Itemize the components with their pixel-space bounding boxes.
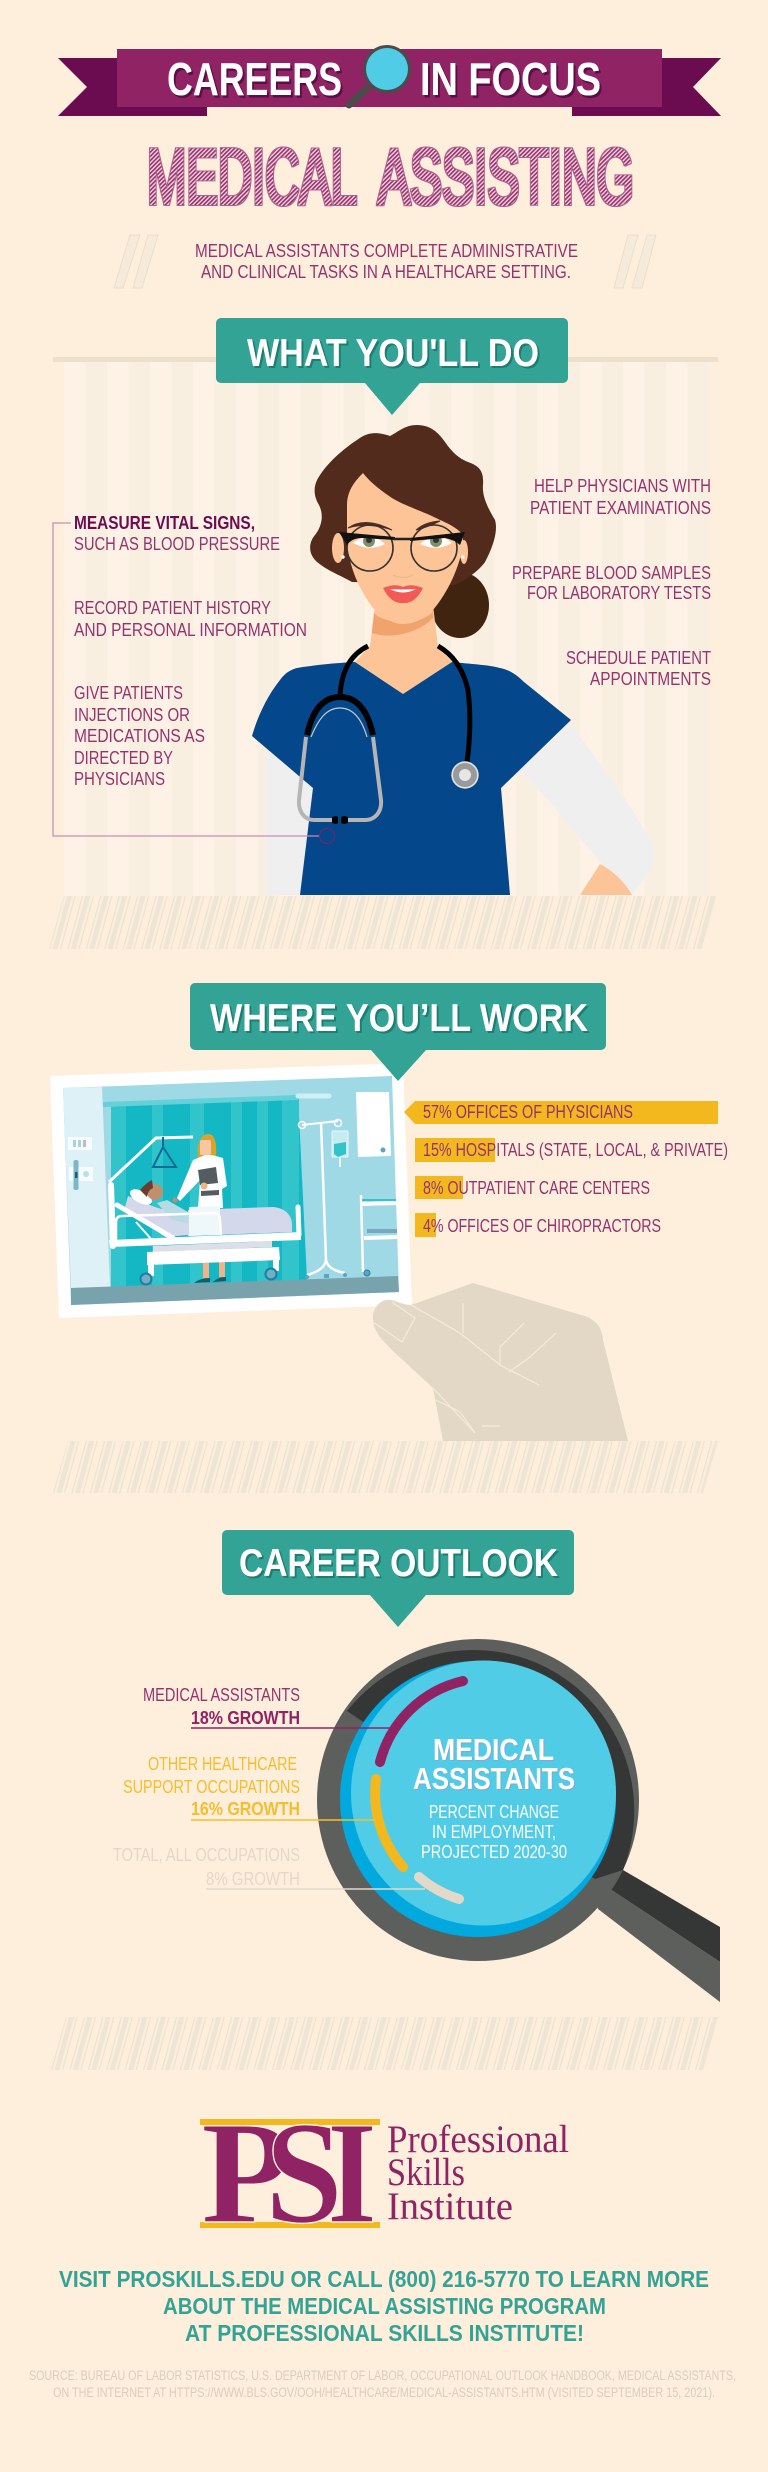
nurse glasses bbox=[339, 525, 465, 571]
bar: offices of physicians: 57% OFFICES OF PHYSICIANS bbox=[423, 1102, 633, 1122]
divider band 2 bbox=[53, 1441, 718, 1493]
duty: examinations: PATIENT EXAMINATIONS bbox=[530, 498, 711, 518]
cabinet bbox=[356, 1092, 391, 1157]
label: all occupations growth: 8% GROWTH bbox=[206, 1869, 300, 1889]
logo letters: P bbox=[201, 2091, 291, 2254]
ribbon title right: IN FOCUS bbox=[420, 53, 601, 105]
heading bubble: career outlook bbox=[222, 1530, 574, 1627]
duty: appointments: SCHEDULE PATIENT bbox=[566, 648, 711, 668]
header ribbon bbox=[58, 45, 721, 116]
stethoscope bbox=[299, 646, 479, 824]
text: right duties bbox=[512, 476, 711, 689]
nurse scrubs bbox=[252, 662, 571, 895]
duty: injections: DIRECTED BY bbox=[74, 748, 173, 768]
intro text bbox=[195, 241, 578, 282]
trapeze bar bbox=[109, 1137, 193, 1182]
bar: chiropractors bbox=[415, 1213, 661, 1237]
floor bbox=[71, 1276, 399, 1305]
label: other healthcare growth: OTHER HEALTHCARE bbox=[148, 1754, 297, 1774]
nurse hand bbox=[580, 864, 632, 895]
heading bubble: where you'll work bbox=[190, 983, 606, 1081]
duty: appointments: APPOINTMENTS bbox=[590, 669, 711, 689]
duty: patient history: AND PERSONAL INFORMATION bbox=[74, 620, 307, 640]
nurse illustration bbox=[252, 425, 655, 895]
divider band 1 bbox=[49, 896, 718, 949]
nurse hair bun bbox=[431, 572, 489, 638]
duty: blood samples: PREPARE BLOOD SAMPLES bbox=[512, 563, 711, 583]
lens text: ASSISTANTS bbox=[413, 1761, 575, 1796]
label: medical assistants growth bbox=[143, 1685, 392, 1728]
heading bubble: what you'll do: WHAT YOU'LL DO bbox=[247, 332, 539, 375]
heading bubble: career outlook: CAREER OUTLOOK bbox=[239, 1542, 558, 1585]
duty: patient history: RECORD PATIENT HISTORY bbox=[74, 598, 271, 618]
duty: vital signs: SUCH AS BLOOD PRESSURE bbox=[74, 534, 280, 554]
call to action: VISIT PROSKILLS.EDU OR CALL (800) 216-5770 TO LEARN MORE bbox=[59, 2266, 709, 2292]
duty: vital signs: MEASURE VITAL SIGNS, bbox=[74, 513, 255, 533]
duty: examinations: HELP PHYSICIANS WITH bbox=[534, 476, 711, 496]
bar: outpatient care bbox=[415, 1176, 650, 1199]
nurse white undersleeves bbox=[266, 723, 655, 895]
call to action bbox=[59, 2266, 709, 2346]
label: other healthcare growth: SUPPORT OCCUPATIONS bbox=[123, 1777, 300, 1797]
lens text: PROJECTED 2020-30 bbox=[421, 1842, 567, 1862]
logo name: Institute bbox=[387, 2185, 513, 2228]
photo: hospital room bbox=[50, 1063, 412, 1318]
duty: injections: MEDICATIONS AS bbox=[74, 726, 205, 746]
bar: chiropractors: 4% OFFICES OF CHIROPRACTORS bbox=[423, 1216, 661, 1236]
duty: injections bbox=[74, 683, 205, 789]
lens text: MEDICAL bbox=[433, 1732, 554, 1767]
lens text bbox=[413, 1732, 575, 1862]
label: medical assistants growth: MEDICAL ASSISTANTS bbox=[143, 1685, 300, 1705]
divider band 3 bbox=[51, 2017, 718, 2070]
ribbon title left: CAREERS bbox=[167, 53, 342, 105]
heading bubble: where you'll work: WHERE YOU’LL WORK bbox=[210, 997, 588, 1040]
intro text: MEDICAL ASSISTANTS COMPLETE ADMINISTRATIVE bbox=[195, 241, 578, 261]
label: all occupations growth bbox=[113, 1845, 425, 1889]
logo letters bbox=[201, 2091, 377, 2254]
curtain bbox=[103, 1095, 329, 1287]
duty: blood samples: FOR LABORATORY TESTS bbox=[527, 583, 711, 603]
growth arc: other healthcare bbox=[375, 1779, 403, 1867]
text: left duties bbox=[74, 513, 307, 789]
logo: Professional Skills Institute bbox=[200, 2091, 569, 2254]
connector bracket bbox=[53, 523, 334, 844]
duty: injections: PHYSICIANS bbox=[74, 769, 165, 789]
logo name: Professional bbox=[387, 2118, 569, 2161]
wall plates bbox=[68, 1137, 93, 1190]
label: all occupations growth: TOTAL, ALL OCCUPATIONS bbox=[113, 1845, 300, 1865]
duty: blood samples bbox=[512, 563, 711, 603]
doctor bbox=[177, 1134, 227, 1283]
panel backdrop: what you'll do bbox=[53, 357, 718, 896]
logo name bbox=[387, 2118, 569, 2228]
duty: vital signs bbox=[74, 513, 280, 554]
bar: outpatient care: 8% OUTPATIENT CARE CENTERS bbox=[423, 1178, 650, 1198]
logo letters: I bbox=[327, 2091, 377, 2254]
intro text: AND CLINICAL TASKS IN A HEALTHCARE SETTING. bbox=[201, 262, 571, 282]
hand holding photo bbox=[373, 1283, 628, 1441]
logo name: Skills bbox=[387, 2151, 465, 2194]
main title: MEDICAL bbox=[147, 132, 357, 220]
icon: small magnifying glass bbox=[349, 45, 411, 105]
bar chart: workplaces bbox=[404, 1101, 728, 1237]
label: medical assistants growth: 18% GROWTH bbox=[191, 1708, 300, 1728]
growth arc: medical assistants bbox=[380, 1681, 463, 1762]
source note bbox=[29, 2368, 736, 2400]
label: other healthcare growth bbox=[123, 1754, 375, 1820]
nurse face bbox=[332, 473, 468, 624]
logo letters: S bbox=[265, 2091, 343, 2254]
shelf bbox=[361, 1195, 397, 1276]
nurse hair bbox=[310, 425, 496, 585]
duty: injections: GIVE PATIENTS bbox=[74, 683, 183, 703]
call to action: AT PROFESSIONAL SKILLS INSTITUTE! bbox=[185, 2320, 584, 2346]
duty: injections: INJECTIONS OR bbox=[74, 705, 190, 725]
iv stand bbox=[298, 1120, 348, 1279]
nurse neck bbox=[355, 605, 452, 694]
duty: examinations bbox=[530, 476, 711, 518]
intro slashes bbox=[114, 235, 656, 288]
hospital bed and patient bbox=[109, 1180, 301, 1284]
duty: appointments bbox=[566, 648, 711, 689]
lens text: IN EMPLOYMENT, bbox=[432, 1822, 556, 1842]
heading bubble: what you'll do bbox=[216, 318, 568, 415]
lens text: PERCENT CHANGE bbox=[429, 1802, 559, 1822]
large magnifying glass bbox=[317, 1639, 720, 2002]
label: other healthcare growth: 16% GROWTH bbox=[191, 1799, 300, 1819]
call to action: ABOUT THE MEDICAL ASSISTING PROGRAM bbox=[163, 2293, 606, 2319]
growth arc: all occupations bbox=[419, 1877, 459, 1899]
duty: patient history bbox=[74, 598, 307, 640]
